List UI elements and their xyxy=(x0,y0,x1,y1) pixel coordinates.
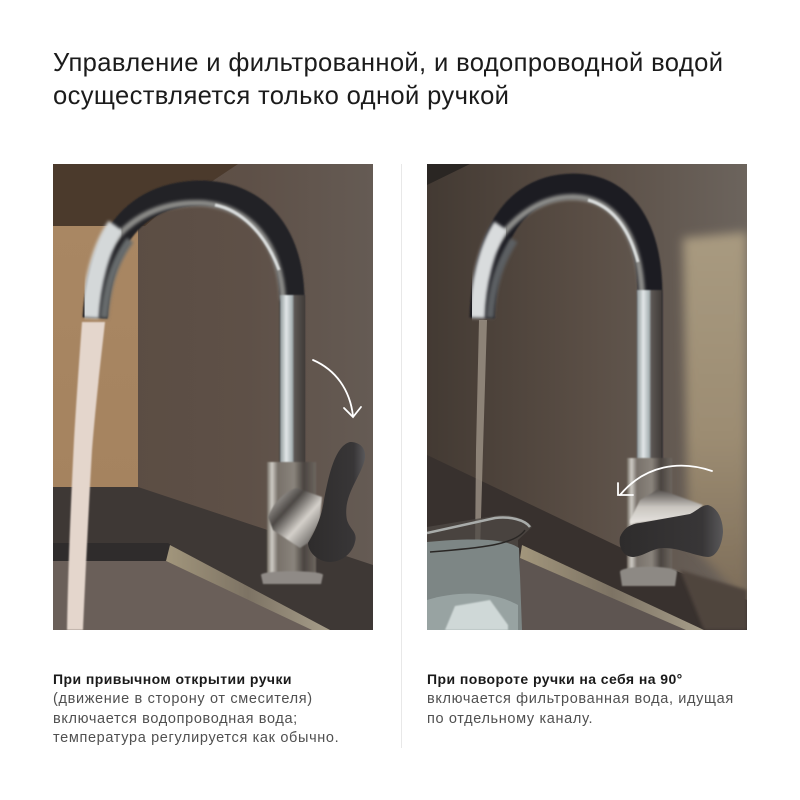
title xyxy=(53,49,723,110)
text block: tap water: При привычном открытии ручки xyxy=(53,671,292,687)
faucet neck and spout xyxy=(90,193,292,465)
panel: photo of faucet with tap water xyxy=(53,164,373,630)
glass jug xyxy=(427,515,532,630)
text block: tap water xyxy=(53,671,339,746)
sink rim highlight xyxy=(520,545,704,630)
base ring xyxy=(620,567,677,586)
faucet neck chrome xyxy=(280,295,305,465)
faucet body xyxy=(267,462,316,575)
sink xyxy=(53,561,318,630)
title: Управление и фильтрованной, и водопроводной водой xyxy=(53,49,723,77)
chrome lever xyxy=(630,490,703,524)
base ring xyxy=(261,571,323,584)
arrow: handle turns toward user xyxy=(618,466,712,495)
text block: filtered water: включается фильтрованная вода, идущая xyxy=(427,691,734,707)
panel: photo of faucet with filtered water xyxy=(427,164,747,630)
counter right lit part xyxy=(680,570,747,630)
black handle xyxy=(620,505,723,557)
faucet body xyxy=(627,458,672,570)
counter top xyxy=(427,455,747,630)
water stream xyxy=(67,322,105,630)
wall xyxy=(427,164,747,630)
wall xyxy=(138,164,373,565)
counter top xyxy=(53,487,373,630)
text block: tap water: температура регулируется как обычно. xyxy=(53,730,339,746)
black handle xyxy=(308,442,365,562)
water stream xyxy=(475,320,487,552)
arrow: handle moves away xyxy=(313,360,361,417)
divider xyxy=(401,164,402,748)
sink rim dark edge xyxy=(53,543,178,561)
faucet neck chrome xyxy=(637,290,662,462)
sink rim highlight xyxy=(166,545,330,630)
faucet neck and spout xyxy=(477,186,650,465)
text block: filtered water xyxy=(427,671,734,727)
title: осуществляется только одной ручкой xyxy=(53,82,509,110)
sink xyxy=(520,558,690,630)
text block: filtered water: При повороте ручки на себя на 90° xyxy=(427,671,683,687)
text block: filtered water: по отдельному каналу. xyxy=(427,711,593,727)
chrome lever xyxy=(268,488,322,548)
top corner shadow xyxy=(427,164,470,185)
sunlight patch xyxy=(683,232,747,605)
wood panel xyxy=(53,226,138,488)
upper cabinet xyxy=(53,164,238,226)
text block: tap water: включается водопроводная вода; xyxy=(53,711,298,727)
text block: tap water: (движение в сторону от смесителя) xyxy=(53,691,313,707)
